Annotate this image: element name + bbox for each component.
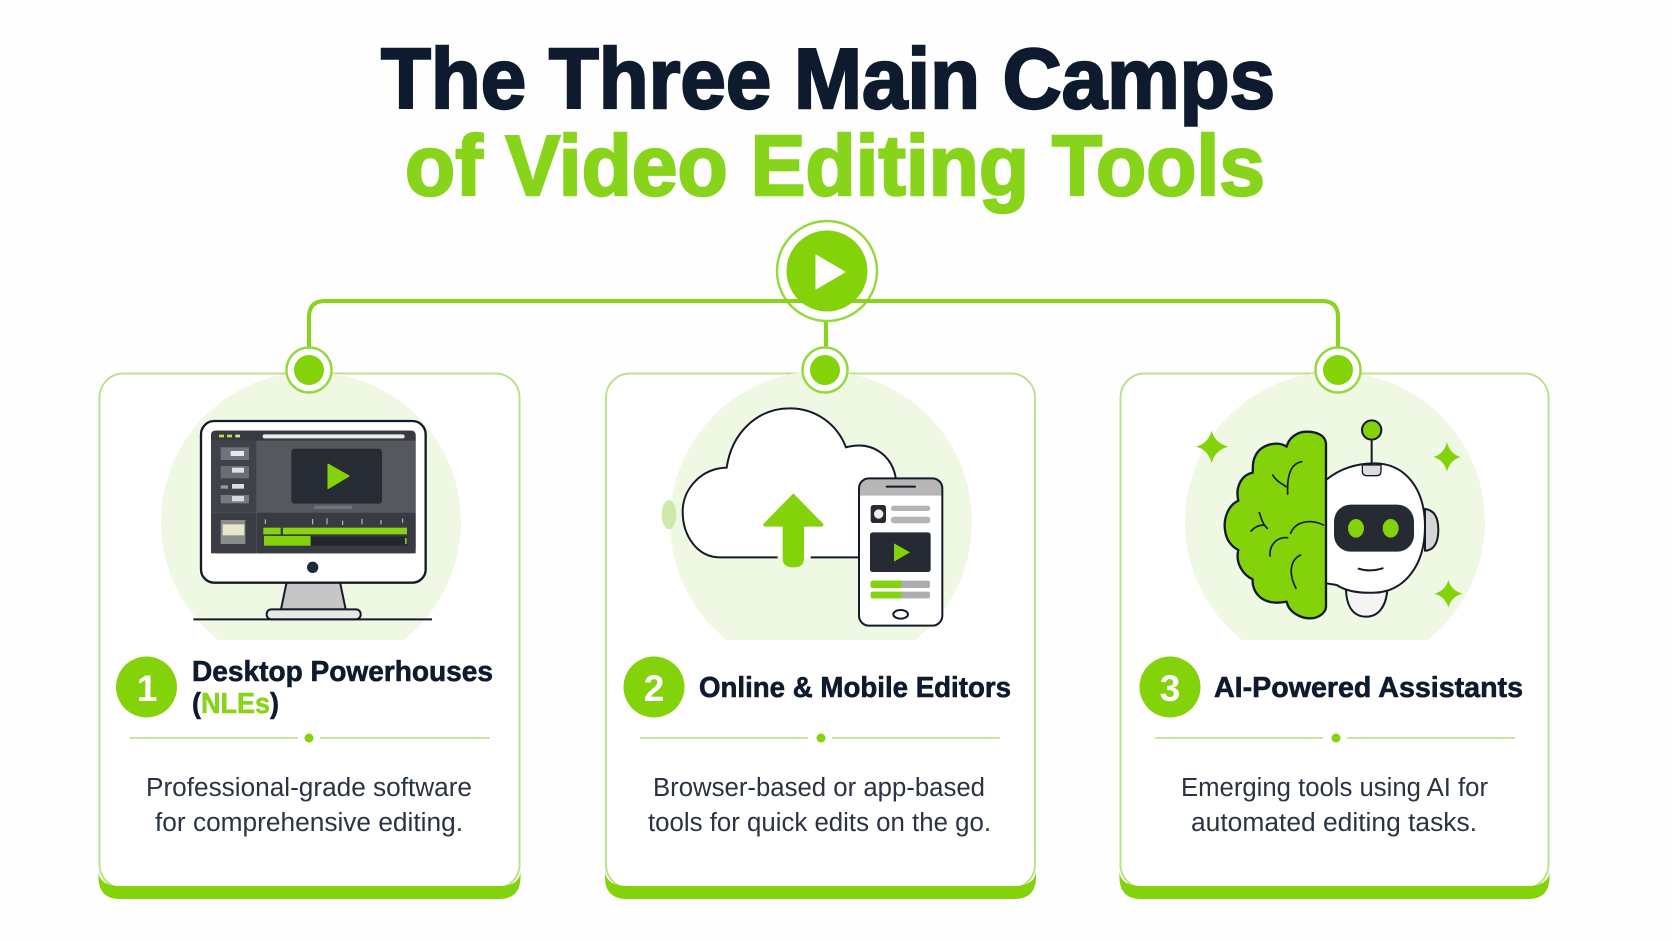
number badge: 3	[1160, 668, 1180, 709]
number badge: 2	[644, 668, 664, 709]
description	[648, 774, 991, 837]
description	[1181, 774, 1489, 837]
divider	[130, 734, 490, 742]
divider	[640, 734, 1000, 742]
number badge	[1140, 656, 1200, 718]
card outline	[1120, 374, 1548, 888]
card bottom accent	[605, 872, 1036, 899]
number badge	[624, 656, 684, 718]
heading: Desktop Powerhouses	[192, 656, 493, 688]
icon backdrop	[1185, 374, 1485, 640]
icon backdrop	[161, 374, 461, 640]
heading: Online & Mobile Editors	[699, 672, 1011, 704]
card outline	[100, 374, 520, 888]
title	[381, 32, 1275, 214]
title: The Three Main Camps	[381, 32, 1275, 127]
panel: desktop powerhouses	[98, 348, 520, 899]
card outline	[606, 374, 1035, 888]
icon: desktop monitor	[193, 421, 432, 619]
panel: online and mobile editors	[605, 348, 1036, 899]
icon backdrop	[670, 372, 972, 640]
description: Emerging tools using AI for	[1181, 774, 1489, 802]
description: tools for quick edits on the go.	[648, 809, 991, 837]
heading: (NLEs)	[192, 688, 279, 720]
card bottom accent	[1120, 872, 1550, 899]
description: Browser-based or app-based	[653, 774, 985, 802]
panel: ai-powered assistants	[1120, 348, 1550, 899]
connector lines	[309, 300, 1338, 350]
card bottom accent	[98, 872, 520, 899]
icon: central play button	[777, 221, 877, 321]
node	[1316, 348, 1360, 392]
description: for comprehensive editing.	[155, 809, 463, 837]
description: Professional-grade software	[146, 774, 472, 802]
number badge: 1	[137, 668, 157, 709]
node	[802, 348, 848, 392]
number badge	[116, 656, 177, 718]
node	[286, 348, 332, 392]
divider	[1155, 734, 1515, 742]
description	[146, 774, 472, 837]
heading	[192, 656, 493, 720]
title: of Video Editing Tools	[405, 119, 1265, 214]
icon: brain and robot	[1196, 420, 1463, 618]
icon: cloud upload and phone	[662, 408, 942, 626]
description: automated editing tasks.	[1191, 809, 1477, 837]
heading: AI-Powered Assistants	[1214, 672, 1523, 704]
